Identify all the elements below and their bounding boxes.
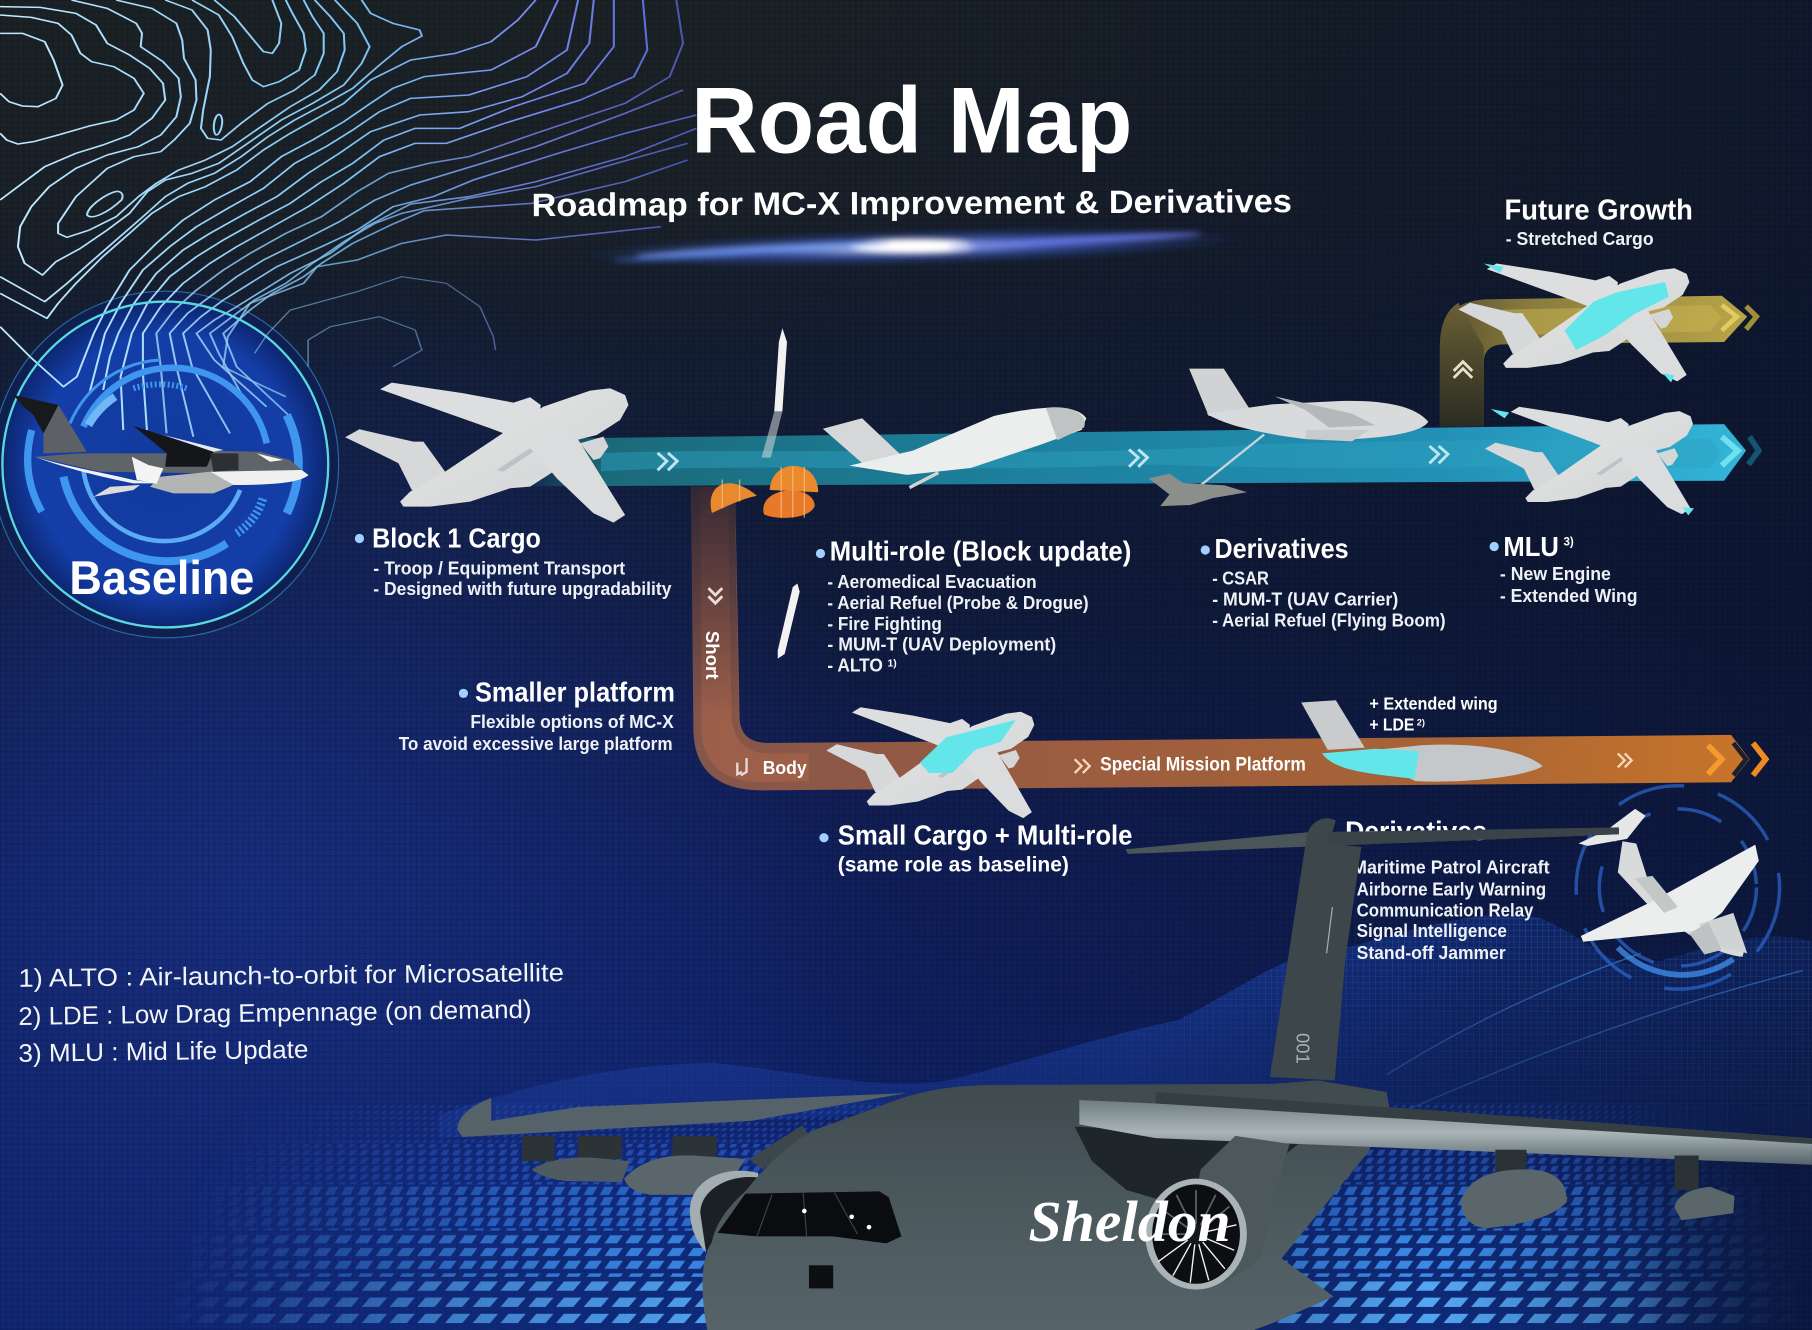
- derivatives list (partly behind tail): Signal Intelligence: [1357, 920, 1507, 941]
- forward engine: [690, 1125, 809, 1253]
- derivatives text: Derivatives: [1215, 533, 1349, 564]
- multi-role text: - Aeromedical Evacuation: [827, 571, 1037, 592]
- special mission notes: 2): [1417, 718, 1425, 728]
- watermark: Sheldon: [1028, 1191, 1231, 1254]
- mlu text: MLU: [1503, 531, 1559, 562]
- mlu text: - New Engine: [1500, 563, 1611, 584]
- mlu text: [1490, 531, 1637, 606]
- main engine: [1145, 1136, 1290, 1290]
- derivatives list (partly behind tail): Derivatives: [1345, 816, 1487, 846]
- derivatives text: [1201, 533, 1446, 630]
- aircraft: small cargo: [826, 707, 1034, 818]
- radar rings: [28, 360, 298, 561]
- outboard engines: [1461, 1150, 1735, 1228]
- baseline circle disc: [0, 291, 339, 638]
- tail: 001: [1293, 1033, 1314, 1064]
- block 1 cargo text: Block 1 Cargo: [372, 523, 541, 554]
- block 1 cargo text: - Designed with future upgradability: [373, 578, 672, 599]
- fuselage: [703, 1080, 1389, 1330]
- small cargo text: (same role as baseline): [838, 853, 1069, 876]
- smaller platform text: Flexible options of MC-X: [470, 711, 674, 732]
- block 1 cargo text: - Troop / Equipment Transport: [373, 557, 625, 578]
- wave mesh hills: [439, 914, 1812, 1156]
- special mission notes: + Extended wing: [1369, 693, 1498, 713]
- footnotes: 3) MLU : Mid Life Update: [18, 1036, 309, 1068]
- light streak: [577, 221, 1248, 273]
- footnotes: 2) LDE : Low Drag Empennage (on demand): [18, 996, 532, 1031]
- title: Road Map: [691, 68, 1132, 173]
- label: body: Body: [763, 757, 807, 778]
- smaller platform text: [399, 676, 675, 754]
- panel: cyan main roadmap band: [509, 424, 1759, 486]
- nose hatch: [809, 1265, 833, 1288]
- special mission notes: [1369, 693, 1498, 734]
- aircraft: special mission jet: [1579, 809, 1759, 957]
- panel: orange short body band: [691, 486, 1766, 790]
- left wing: [458, 1093, 906, 1195]
- aircraft: block 1 cargo: [345, 383, 628, 523]
- parachutes: [711, 466, 818, 518]
- mlu text: 3): [1563, 536, 1574, 548]
- multi-role text: - Fire Fighting: [827, 613, 942, 634]
- multi-role text: - Aerial Refuel (Probe & Drogue): [827, 592, 1089, 613]
- derivatives text: - CSAR: [1212, 568, 1269, 589]
- icon: body marker: [737, 758, 747, 775]
- derivatives text: - MUM-T (UAV Carrier): [1212, 588, 1398, 609]
- smaller platform text: To avoid excessive large platform: [399, 733, 673, 754]
- derivatives list (partly behind tail): Airborne Early Warning: [1357, 879, 1546, 900]
- label: baseline: Baseline: [69, 552, 254, 605]
- rocket launch: [762, 328, 787, 458]
- footnotes: 1) ALTO : Air-launch-to-orbit for Microsatellite: [18, 959, 564, 993]
- small cargo text: [819, 820, 1132, 876]
- derivatives list (partly behind tail): [1345, 816, 1550, 963]
- future growth text: - Stretched Cargo: [1506, 228, 1654, 249]
- multi-role text: [816, 535, 1131, 675]
- air launched rocket: [778, 584, 800, 659]
- smaller platform text: Smaller platform: [475, 676, 675, 707]
- aircraft: future growth stretched cargo: [1458, 263, 1689, 382]
- fighter: [1149, 474, 1247, 506]
- derivatives text: - Aerial Refuel (Flying Boom): [1212, 609, 1446, 630]
- icon: special mission radar rings: [1576, 786, 1780, 989]
- subtitle: Roadmap for MC-X Improvement & Derivatives: [531, 183, 1292, 223]
- baseline circle rings and label: [2, 302, 328, 627]
- aircraft: derivatives tanker with fighter: [1149, 369, 1428, 506]
- mlu text: - Extended Wing: [1500, 585, 1637, 606]
- label: special mission platform: Special Mission Platform: [1100, 754, 1306, 776]
- aircraft: multi-role: [823, 407, 1086, 488]
- derivatives list (partly behind tail): Maritime Patrol Aircraft: [1352, 857, 1550, 878]
- block 1 cargo text: [355, 523, 672, 599]
- label: short: Short: [702, 631, 723, 679]
- multi-role text: Multi-role (Block update): [830, 535, 1131, 566]
- small cargo text: Small Cargo + Multi-role: [838, 820, 1132, 851]
- icon: baseline aircraft: [13, 395, 308, 497]
- footnotes: [18, 959, 564, 1068]
- tail: [1126, 818, 1619, 1080]
- multi-role text: - MUM-T (UAV Deployment): [827, 634, 1056, 655]
- contour lines: [0, 0, 696, 437]
- perspective floor pattern: [196, 1104, 1772, 1330]
- aircraft: mlu: [1485, 407, 1694, 515]
- multi-role text: - ALTO: [827, 654, 883, 675]
- future growth text: Future Growth: [1505, 195, 1693, 227]
- special mission notes: + LDE: [1369, 714, 1414, 734]
- main aircraft: [458, 818, 1812, 1330]
- panel: gold future growth band: [1440, 296, 1756, 426]
- right wing: [1079, 1092, 1812, 1165]
- future growth text: [1505, 195, 1693, 249]
- derivatives list (partly behind tail): Communication Relay: [1357, 899, 1534, 920]
- aircraft: special mission platform: [1301, 700, 1543, 782]
- cockpit windows: [718, 1191, 901, 1243]
- derivatives list (partly behind tail): Stand-off Jammer: [1357, 942, 1506, 963]
- under-wing shadow: [1075, 1127, 1306, 1202]
- multi-role text: 1): [888, 659, 897, 670]
